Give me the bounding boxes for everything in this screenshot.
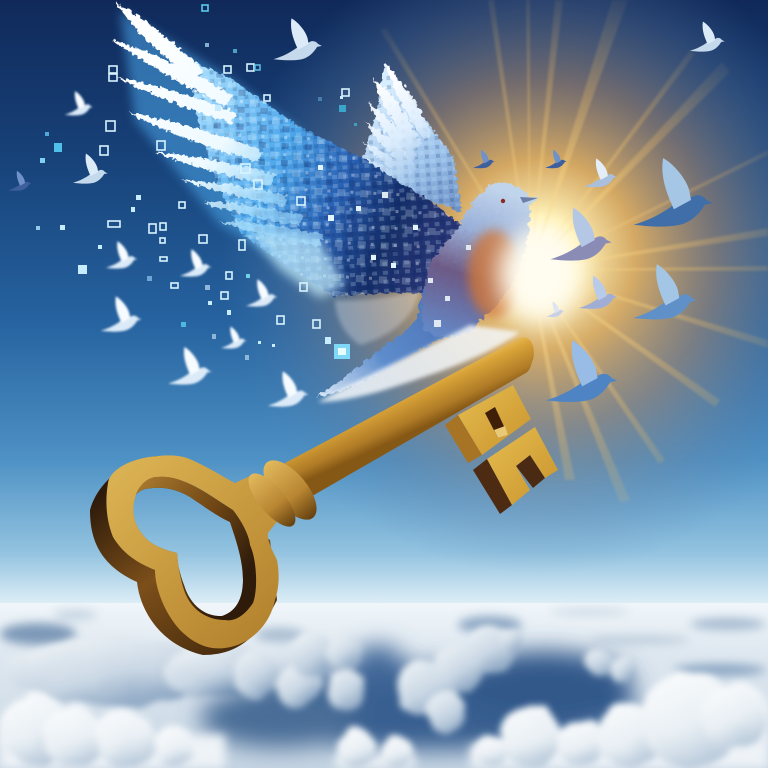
scattered data pixels (36, 5, 471, 360)
sun rays (380, 0, 768, 503)
hollow data squares (100, 5, 349, 328)
foreground soft cloud bank (0, 700, 768, 768)
main wing glow (245, 228, 345, 298)
sun core over bird (498, 227, 582, 323)
distant cloud shadows (0, 609, 766, 676)
blue valley between cloud banks (200, 645, 635, 750)
white mist under tail (318, 325, 520, 402)
sunburst (220, 0, 768, 575)
foreground cloud puffs (0, 672, 768, 768)
cloud base (0, 603, 768, 768)
large digital dove (112, 2, 538, 402)
translucent underwing (335, 290, 420, 345)
light birds on the left (65, 91, 308, 407)
bow inner wall (130, 477, 256, 620)
key bit (445, 385, 558, 514)
wing outer haze (120, 10, 300, 270)
lower bit block (473, 427, 558, 514)
bow gold face (106, 455, 290, 648)
mid cloud ridges (233, 626, 635, 732)
chest warm glow (468, 230, 520, 318)
rear wing (363, 63, 462, 212)
eye (501, 199, 505, 203)
flock of small birds (8, 18, 725, 407)
blue birds on the left and top (73, 18, 725, 184)
body (422, 183, 538, 337)
key collar (241, 451, 326, 534)
upper bit block (445, 385, 531, 463)
sun glow (220, 0, 768, 575)
beak (520, 197, 538, 203)
mid cloud puffs behind valley (5, 638, 265, 706)
bow dark edge (90, 456, 277, 655)
key shaft (285, 337, 534, 503)
blue birds near the sun (546, 158, 713, 402)
filled data squares (36, 43, 471, 360)
key bow (90, 455, 290, 655)
rear wing feathers (363, 63, 432, 197)
main wing feathers (112, 2, 323, 246)
golden key (90, 337, 558, 655)
dark distant birds (8, 150, 567, 191)
clouds (0, 603, 768, 768)
tail (317, 285, 470, 397)
main wing (112, 2, 462, 298)
